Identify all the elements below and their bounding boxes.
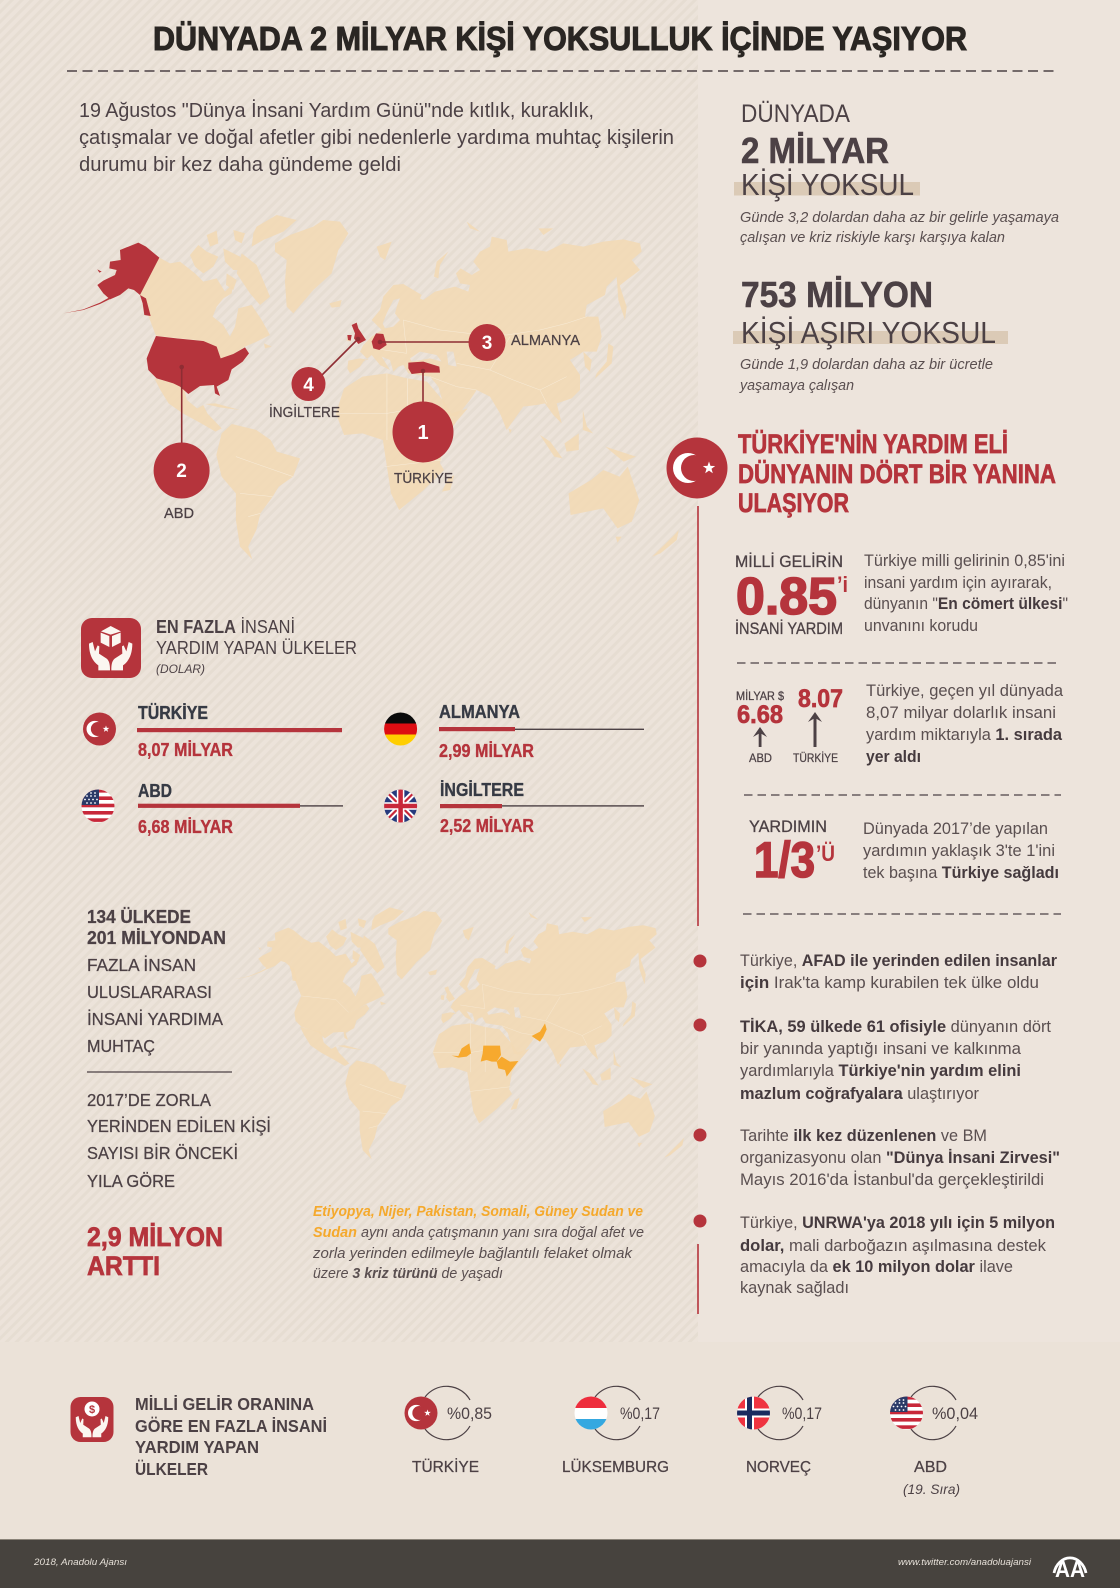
chart: 6.68 vs 8.07: MİLYAR $ (736, 690, 785, 703)
highlighted countries (63, 243, 440, 396)
text: first rank: Türkiye, geçen yıl dünyada (866, 681, 1064, 700)
heading: (DOLAR) (156, 662, 205, 676)
marker 3: Almanya (468, 324, 580, 361)
stat: 753 million: KİŞİ AŞIRI YOKSUL (741, 315, 996, 350)
bullet: summit: organizasyonu olan "Dünya İnsani Zirvesi" (740, 1148, 1060, 1167)
text: generous country (864, 551, 1068, 635)
highlighted crisis countries (452, 1023, 547, 1077)
intro text: 19 Ağustos "Dünya İnsani Yardım Günü"nde kıtlık, kuraklık, (79, 99, 594, 122)
chart: 6.68 vs 8.07: 8.07 (798, 685, 843, 713)
chart: 6.68 vs 8.07: 6.68 (737, 701, 783, 729)
caption: crisis countries: Sudan aynı anda çatışmanın yanı sıra doğal afet ve (313, 1225, 644, 1241)
text: first rank (866, 681, 1064, 766)
stat: 2 billion: Günde 3,2 dolardan daha az bir gelirle yaşamaya (740, 209, 1059, 226)
bullet: summit: Mayıs 2016'da İstanbul'da gerçekleştirildi (740, 1170, 1044, 1189)
title: DÜNYADA 2 MİLYAR KİŞİ YOKSULLUK İÇİNDE YAŞIYOR (153, 20, 967, 57)
item: Lüksemburg: %0,17 (620, 1404, 660, 1423)
text block: people in need: 134 ÜLKEDE (87, 907, 191, 927)
stat: 753 million: yaşamaya çalışan (739, 377, 854, 394)
row: İngiltere: 2,52 MİLYAR (440, 816, 534, 836)
heading: MİLLİ GELİR ORANINA (135, 1394, 314, 1414)
world map: crisis countries (233, 907, 684, 1159)
bullet: TİKA: bir yanında yaptığı insani ve kalkınma (740, 1039, 1022, 1058)
heading: GÖRE EN FAZLA İNSANİ (135, 1416, 327, 1436)
row: ABD: 6,68 MİLYAR (138, 817, 233, 837)
right column: poverty figures (733, 100, 1059, 394)
stat: one third: YARDIMIN (749, 817, 827, 836)
marker 4: İngiltere: 4 (303, 375, 314, 396)
stat: one third: ’Ü (816, 841, 835, 866)
chart: 6.68 vs 8.07: ABD (749, 751, 772, 765)
striped left panel background (0, 0, 698, 1342)
text block: people in need: SAYISI BİR ÖNCEKİ (87, 1143, 238, 1163)
row: Almanya (384, 702, 644, 761)
heading (738, 429, 1056, 518)
caption: crisis countries: Etiyopya, Nijer, Pakistan, Somali, Güney Sudan ve (313, 1204, 643, 1220)
chart: 6.68 vs 8.07 (736, 685, 843, 765)
row: İngiltere (384, 780, 644, 836)
text: generous country: dünyanın "En cömert ülkesi" (864, 594, 1068, 613)
marker 4: İngiltere: İNGİLTERE (269, 403, 340, 421)
bullet: TİKA: TİKA, 59 ülkede 61 ofisiyle dünyanın dört (740, 1017, 1051, 1036)
highlight bars (733, 182, 1008, 344)
text: generous country: unvanını korudu (864, 616, 978, 635)
heading: YARDIM YAPAN ÜLKELER (156, 638, 357, 658)
item: Norveç (736, 1386, 822, 1476)
item: ABD (890, 1386, 978, 1497)
text block: people in need: İNSANİ YARDIMA (87, 1009, 223, 1029)
icon: Turkish flag circle (666, 438, 728, 498)
stat: 2 billion: çalışan ve kriz riskiyle karşı karşıya kalan (740, 229, 1005, 246)
item: ABD: (19. Sıra) (903, 1481, 960, 1497)
text: generous country: Türkiye milli gelirinin 0,85'ini (864, 551, 1065, 570)
text: one third: yardımın yaklaşık 3'te 1'ini (863, 841, 1055, 860)
stat: 2 billion: KİŞİ YOKSUL (741, 167, 914, 202)
stat: 2 billion: 2 MİLYAR (741, 130, 889, 171)
text: one third: Dünyada 2017’de yapılan (863, 819, 1048, 838)
heading: EN FAZLA İNSANİ (156, 617, 295, 637)
bullet: summit: Tarihte ilk kez düzenlenen ve BM (740, 1126, 987, 1145)
footer (0, 1539, 1120, 1588)
stat: 2.9 million: 2,9 MİLYON (87, 1222, 223, 1252)
marker 3: Almanya: 3 (482, 333, 492, 354)
text block: people in need: 2017’DE ZORLA (87, 1090, 211, 1110)
bullet: AFAD: için Irak'ta kamp kurabilen tek ülke oldu (740, 973, 1039, 992)
text block: people in need: YERİNDEN EDİLEN KİŞİ (87, 1116, 271, 1136)
marker 4: İngiltere (269, 367, 340, 421)
icon: hands holding coin (70, 1397, 114, 1442)
heading: YARDIM YAPAN (135, 1437, 259, 1457)
text: first rank: yer aldı (866, 747, 921, 766)
stat: 0.85: 0.85 (736, 568, 837, 626)
marker 1: Türkiye: 1 (417, 422, 429, 444)
stat: 2 billion (740, 100, 1059, 246)
arrow: ABD (753, 727, 767, 747)
bullet: UNRWA: amacıyla da ek 10 milyon dolar ilave (740, 1257, 1013, 1276)
text block: people in need: MUHTAÇ (87, 1036, 155, 1056)
marker 2: ABD (154, 442, 210, 522)
bullet: TİKA: mazlum coğrafyalara ulaştırıyor (740, 1084, 979, 1103)
bottom band background (0, 1342, 1120, 1539)
panel: aid by national income (70, 1386, 978, 1497)
item: Lüksemburg (562, 1386, 669, 1476)
bullet: UNRWA: dolar, mali darboğazın aşılmasına destek (740, 1236, 1046, 1255)
logo: AA (1055, 1556, 1085, 1582)
intro text (79, 99, 674, 176)
bullet: UNRWA: kaynak sağladı (740, 1278, 849, 1297)
text block: people in need (87, 907, 271, 1191)
bullet: TİKA (694, 1017, 1051, 1103)
bullet list (694, 951, 1060, 1314)
stat: one third (749, 817, 835, 888)
stat: 2 billion: DÜNYADA (741, 100, 850, 128)
stat: 2.9 million: ARTTI (87, 1251, 160, 1281)
heading: DÜNYANIN DÖRT BİR YANINA (738, 459, 1056, 489)
caption: crisis countries (312, 1204, 644, 1282)
row: Türkiye (83, 703, 342, 760)
row: ABD: ABD (138, 781, 172, 801)
stat: 753 million (739, 274, 996, 394)
row: Türkiye: TÜRKİYE (138, 703, 208, 723)
heading (135, 1394, 327, 1479)
item: Türkiye: %0,85 (447, 1404, 492, 1423)
row: Türkiye: 8,07 MİLYAR (138, 740, 233, 760)
marker 1: Türkiye (392, 402, 454, 487)
intro text: durumu bir kez daha gündeme geldi (79, 154, 401, 176)
text: one third: tek başına Türkiye sağladı (863, 863, 1059, 882)
caption: crisis countries: üzere 3 kriz türünü de yaşadı (313, 1266, 503, 1282)
stat: 0.85 (735, 552, 848, 638)
stat: 0.85: İNSANİ YARDIM (735, 619, 843, 638)
text block: people in need: 201 MİLYONDAN (87, 928, 226, 948)
icon: hands holding box (81, 618, 141, 678)
timeline line (697, 506, 699, 926)
text block: people in need: FAZLA İNSAN (87, 955, 196, 975)
copyright: 2018, Anadolu Ajansı (33, 1557, 127, 1568)
right panel: Turkey's aid (666, 429, 1068, 926)
row: İngiltere: İNGİLTERE (440, 780, 524, 800)
bullet: TİKA: yardımlarıyla Türkiye'nin yardım elini (740, 1061, 1021, 1080)
stat: 753 million: 753 MİLYON (741, 274, 933, 315)
text block: people in need: YILA GÖRE (87, 1171, 175, 1191)
heading: ÜLKELER (135, 1459, 208, 1479)
bullet: summit (694, 1126, 1060, 1189)
text: first rank: 8,07 milyar dolarlık insani (866, 703, 1056, 722)
item: Norveç: %0,17 (782, 1404, 822, 1423)
marker 2: ABD: 2 (176, 461, 187, 482)
stat: 0.85: MİLLİ GELİRİN (735, 552, 843, 571)
heading (156, 617, 357, 676)
bullet: AFAD: Türkiye, AFAD ile yerinden edilen insanlar (740, 951, 1057, 970)
text: one third (863, 819, 1059, 882)
bullet: UNRWA (694, 1213, 1055, 1314)
row: Almanya: ALMANYA (439, 702, 520, 722)
row: Almanya: 2,99 MİLYAR (439, 741, 534, 761)
item: Türkiye: TÜRKİYE (412, 1457, 479, 1476)
stat: 753 million: Günde 1,9 dolardan daha az bir ücretle (740, 356, 993, 373)
world map: top aid countries (63, 215, 679, 559)
caption: crisis countries: zorla yerinden edilmeyle bağlantılı felaket olmak (312, 1246, 633, 1262)
arrow: Türkiye (808, 712, 822, 747)
marker 2: ABD: ABD (164, 505, 194, 522)
heading: TÜRKİYE'NİN YARDIM ELİ (738, 429, 1008, 459)
marker lines (179, 337, 470, 445)
item: ABD: ABD (914, 1459, 947, 1476)
icon: hands holding coin: $ (89, 1404, 95, 1416)
marker 1: Türkiye: TÜRKİYE (394, 469, 453, 487)
item: Türkiye (404, 1386, 492, 1476)
item: Lüksemburg: LÜKSEMBURG (562, 1458, 669, 1476)
heading: ULAŞIYOR (738, 488, 849, 518)
item: ABD: %0,04 (932, 1404, 978, 1423)
bullet: UNRWA: Türkiye, UNRWA'ya 2018 yılı için 5 milyon (740, 1213, 1055, 1232)
twitter link: www.twitter.com/anadoluajansi (898, 1557, 1032, 1568)
bullet: AFAD (694, 951, 1057, 992)
intro text: çatışmalar ve doğal afetler gibi nedenlerle yardıma muhtaç kişilerin (79, 127, 674, 149)
text block: people in need: ULUSLARARASI (87, 982, 212, 1002)
chart: 6.68 vs 8.07: TÜRKİYE (793, 751, 838, 765)
stat: 2.9 million (87, 1222, 223, 1281)
text: generous country: insani yardım için ayırarak, (864, 573, 1052, 592)
text: first rank: yardım miktarıyla 1. sırada (866, 725, 1063, 744)
marker 3: Almanya: ALMANYA (511, 332, 580, 349)
stat: one third: 1/3 (754, 832, 815, 888)
panel: top donors (81, 617, 644, 837)
item: Norveç: NORVEÇ (746, 1459, 811, 1476)
stat: 0.85: ’i (837, 572, 848, 597)
row: ABD (81, 781, 343, 837)
